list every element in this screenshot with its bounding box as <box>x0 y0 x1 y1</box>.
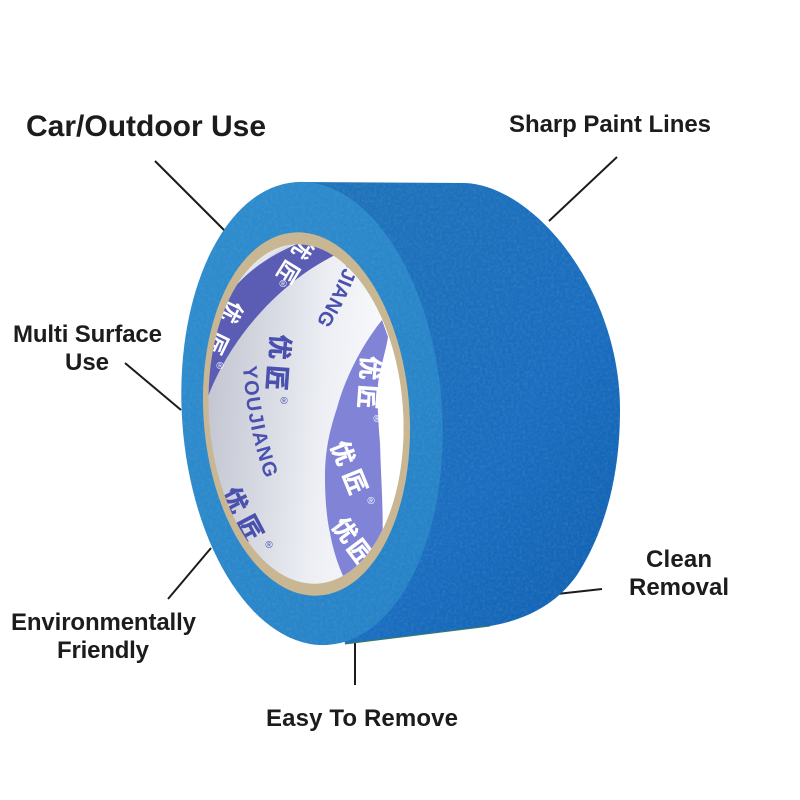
callout lines <box>125 157 617 685</box>
logo marks on white area: 优 <box>216 483 252 518</box>
logo marks on white area: 优 <box>264 333 294 360</box>
white right side <box>378 314 404 538</box>
registered marks: ® <box>265 540 273 551</box>
YOUJIANG lettering <box>243 265 355 477</box>
logo marks on upper band: 匠 <box>201 327 233 358</box>
logo marks on upper band: 优 <box>286 232 319 264</box>
logo marks on upper band: 匠 <box>271 256 304 288</box>
label: Car/Outdoor Use: Car/Outdoor Use <box>26 110 266 143</box>
label: Clean Removal <box>629 546 729 601</box>
label: Environmentally Friendly <box>11 609 197 664</box>
logo marks on white area: 匠 <box>261 364 291 391</box>
registered marks <box>216 279 381 551</box>
cardboard core ring <box>191 225 422 603</box>
logo marks on right band: 优 <box>325 437 359 470</box>
logo marks on right band: 匠 <box>353 384 381 410</box>
purple band right <box>325 320 388 578</box>
logo marks on right band <box>330 356 382 566</box>
logo marks on white area: 匠 <box>231 511 267 546</box>
label: Multi Surface Use: Use <box>65 349 109 376</box>
label: Environmentally Friendly: Environmentally <box>11 609 197 636</box>
tape front face <box>166 173 458 654</box>
logo marks on upper band: 优 <box>216 296 248 327</box>
tape roll body <box>300 182 620 644</box>
core interior <box>208 244 404 584</box>
label: Multi Surface Use: Multi Surface <box>13 321 162 348</box>
blue masking tape roll <box>181 182 620 646</box>
logo marks on white area <box>224 334 293 542</box>
registered marks: ® <box>216 361 224 372</box>
body texture <box>300 182 620 644</box>
face texture <box>166 173 458 654</box>
logo marks on right band: 匠 <box>341 535 377 570</box>
pale upper-left wedge <box>228 245 288 302</box>
purple band upper left <box>208 244 334 395</box>
logo marks on upper band <box>213 244 315 356</box>
label: Clean Removal: Clean <box>646 546 712 573</box>
registered marks: ® <box>279 279 287 290</box>
green bottom edge <box>345 626 490 644</box>
label: Sharp Paint Lines: Sharp Paint Lines <box>509 111 711 138</box>
label: Environmentally Friendly: Friendly <box>57 637 150 664</box>
registered marks: ® <box>367 496 375 507</box>
logo marks on right band: 优 <box>355 355 383 381</box>
logo marks on right band: 优 <box>326 513 362 548</box>
YOUJIANG lettering: YOUJIANG <box>243 366 277 477</box>
label: Clean Removal: Removal <box>629 574 729 601</box>
label: Multi Surface Use <box>13 321 162 376</box>
label: Easy To Remove: Easy To Remove <box>266 705 458 732</box>
registered marks: ® <box>280 396 288 407</box>
logo marks on right band: 匠 <box>337 466 371 499</box>
registered marks: ® <box>373 414 381 425</box>
